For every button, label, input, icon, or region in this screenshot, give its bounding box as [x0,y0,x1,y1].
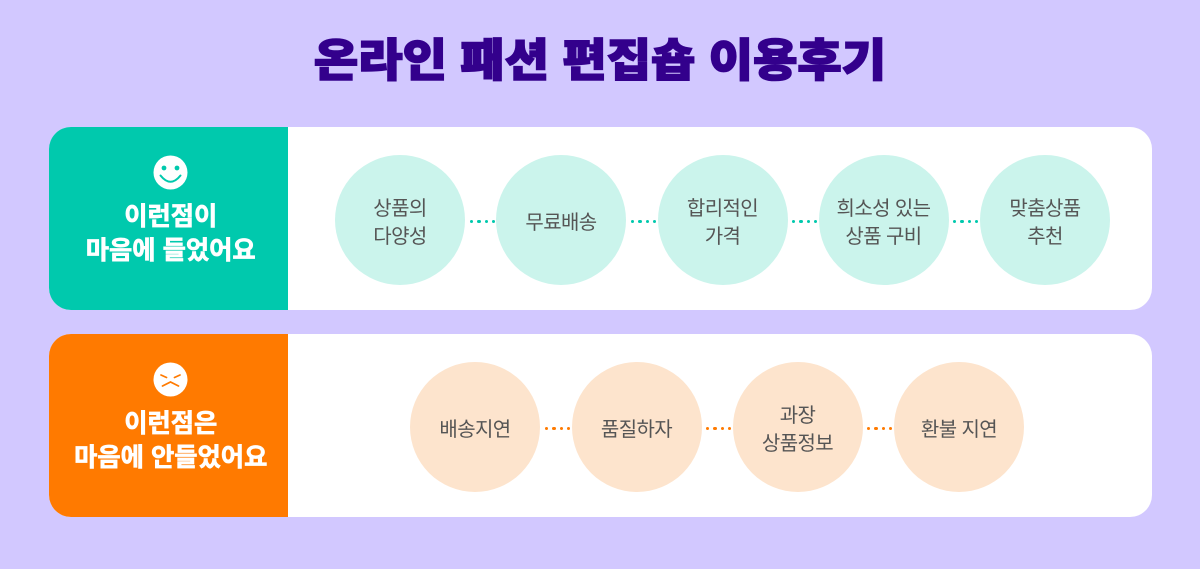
item: personalized recommendation [980,155,1110,285]
connector dots [470,220,495,223]
panel side: dislikes heading [49,334,288,517]
item: shipping delay [410,362,540,492]
item: rare products: 희소성 있는 [837,198,930,220]
item: reasonable price: 합리적인 [687,198,758,220]
heading: likes [86,203,256,265]
connector dots [953,220,978,223]
title: 온라인 패션 편집숍 이용후기 [314,36,886,86]
item: reasonable price [658,155,788,285]
item: product variety [335,155,465,285]
heading: dislikes [74,410,267,472]
item: exaggerated product information: 상품정보 [762,433,833,455]
item: shipping delay: 배송지연 [439,419,511,441]
item: rare products: 상품 구비 [845,226,922,248]
item: free shipping [496,155,626,285]
item: refund delay: 환불 지연 [921,419,997,441]
heading: dislikes: 마음에 안들었어요 [74,444,267,472]
item: personalized recommendation: 맞춤상품 [1009,198,1081,220]
heading: dislikes: 이런점은 [124,410,217,438]
icon: smiling face [154,156,188,190]
connector dots [792,220,817,223]
connector dots [545,427,570,430]
panel: dislikes [49,334,1152,517]
item: refund delay [894,362,1024,492]
item: free shipping: 무료배송 [525,212,597,234]
connector dots [867,427,892,430]
item: rare products [818,155,948,285]
item: quality defect [572,362,702,492]
icon: frowning face [154,362,188,396]
item: product variety: 다양성 [373,226,427,248]
item: exaggerated product information [732,362,862,492]
heading: likes: 마음에 들었어요 [86,237,256,265]
item: exaggerated product information: 과장 [780,405,815,427]
item: personalized recommendation: 추천 [1027,226,1063,248]
item: quality defect: 품질하자 [601,419,672,441]
item: product variety: 상품의 [373,198,427,220]
connector dots [631,220,656,223]
heading: likes: 이런점이 [124,203,217,231]
item: reasonable price: 가격 [705,226,740,248]
panel side: likes heading [49,127,288,310]
connector dots [706,427,731,430]
panel: likes [49,127,1152,310]
